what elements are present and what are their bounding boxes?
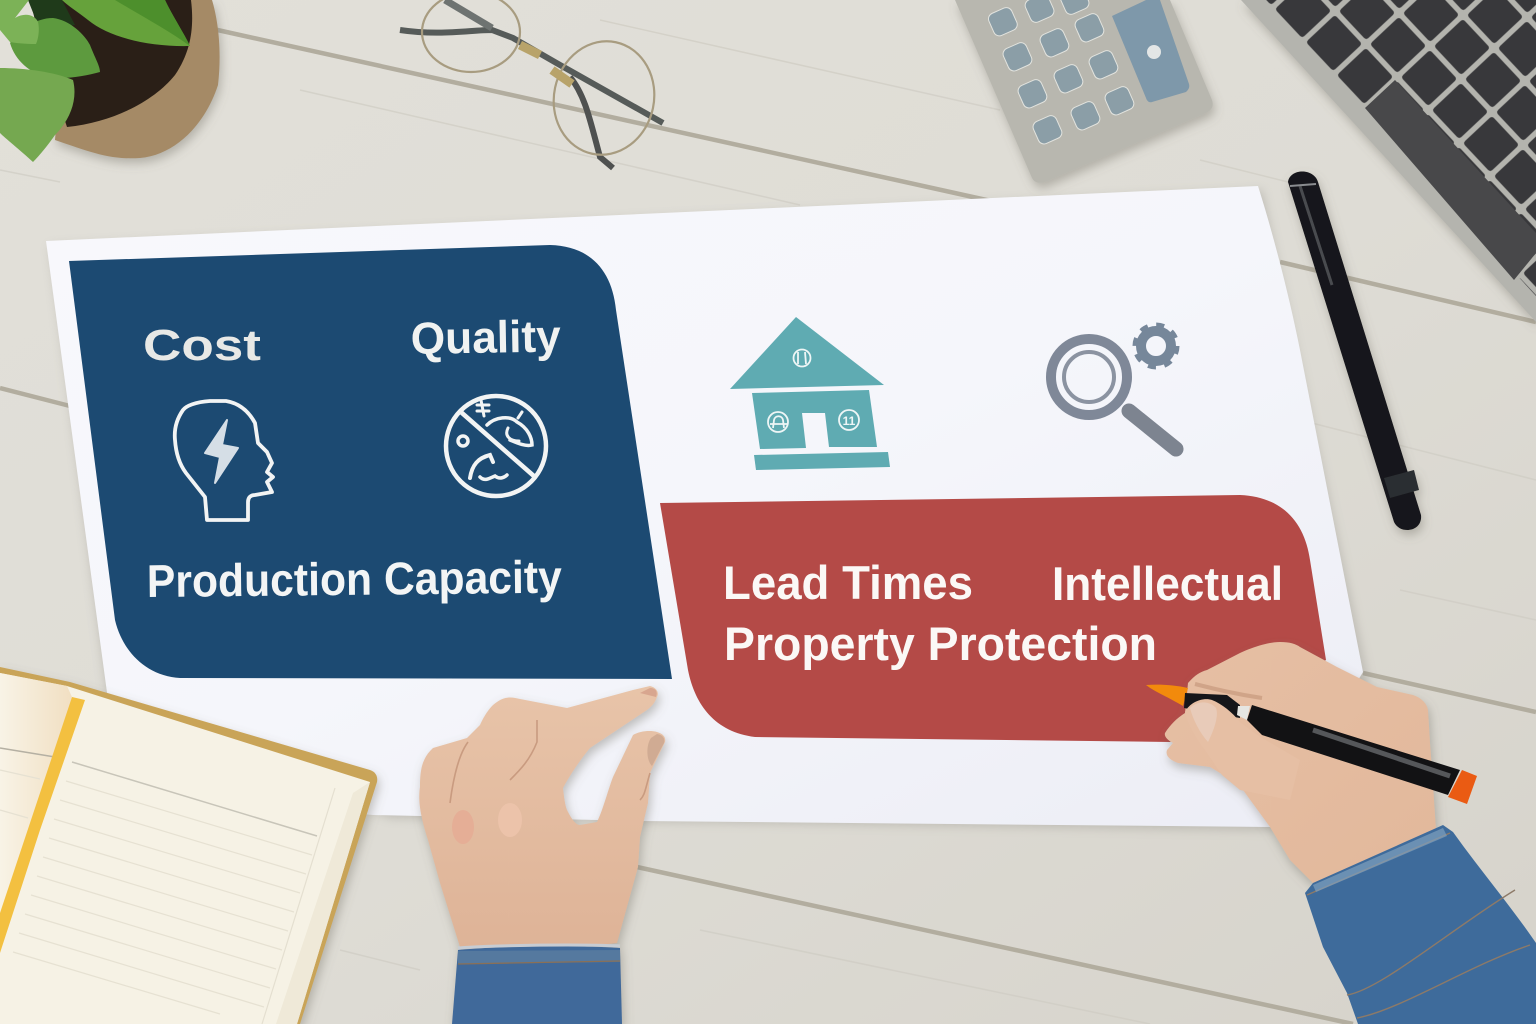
icon: black pen	[1288, 172, 1421, 530]
label: Property Protection: Property Protection	[724, 617, 1157, 670]
left hand	[419, 686, 665, 1024]
panel: red categories	[660, 495, 1326, 742]
icon: calculator	[955, 0, 1213, 183]
icon: keyboard	[1241, 0, 1536, 322]
label: Intellectual: Intellectual	[1052, 557, 1283, 610]
icon: head with lightning bolt	[175, 401, 273, 520]
heading: Quality: Quality	[410, 310, 561, 364]
heading: Cost: Cost	[143, 321, 261, 370]
paper sheet	[46, 186, 1368, 830]
panel: blue categories	[69, 245, 672, 679]
right hand holding marker	[1146, 642, 1536, 1024]
icon: orange marker	[1146, 685, 1477, 804]
left sleeve	[452, 945, 622, 1024]
thumb over marker	[1185, 699, 1300, 800]
right sleeve	[1305, 825, 1536, 1024]
icon: notebook ribbon	[0, 697, 85, 953]
icon: prohibited defects	[446, 396, 546, 496]
potted plant	[0, 0, 220, 162]
notebook	[0, 667, 377, 1024]
icon: teal house	[730, 317, 890, 470]
label: Production Capacity: Production Capacity	[147, 551, 562, 607]
icon: plant leaves	[0, 0, 190, 162]
label: Lead Times: Lead Times	[723, 556, 973, 609]
icon: teal house: 11	[843, 414, 856, 428]
icon: magnifier with gear	[1051, 325, 1177, 449]
icon: glasses	[400, 0, 665, 168]
